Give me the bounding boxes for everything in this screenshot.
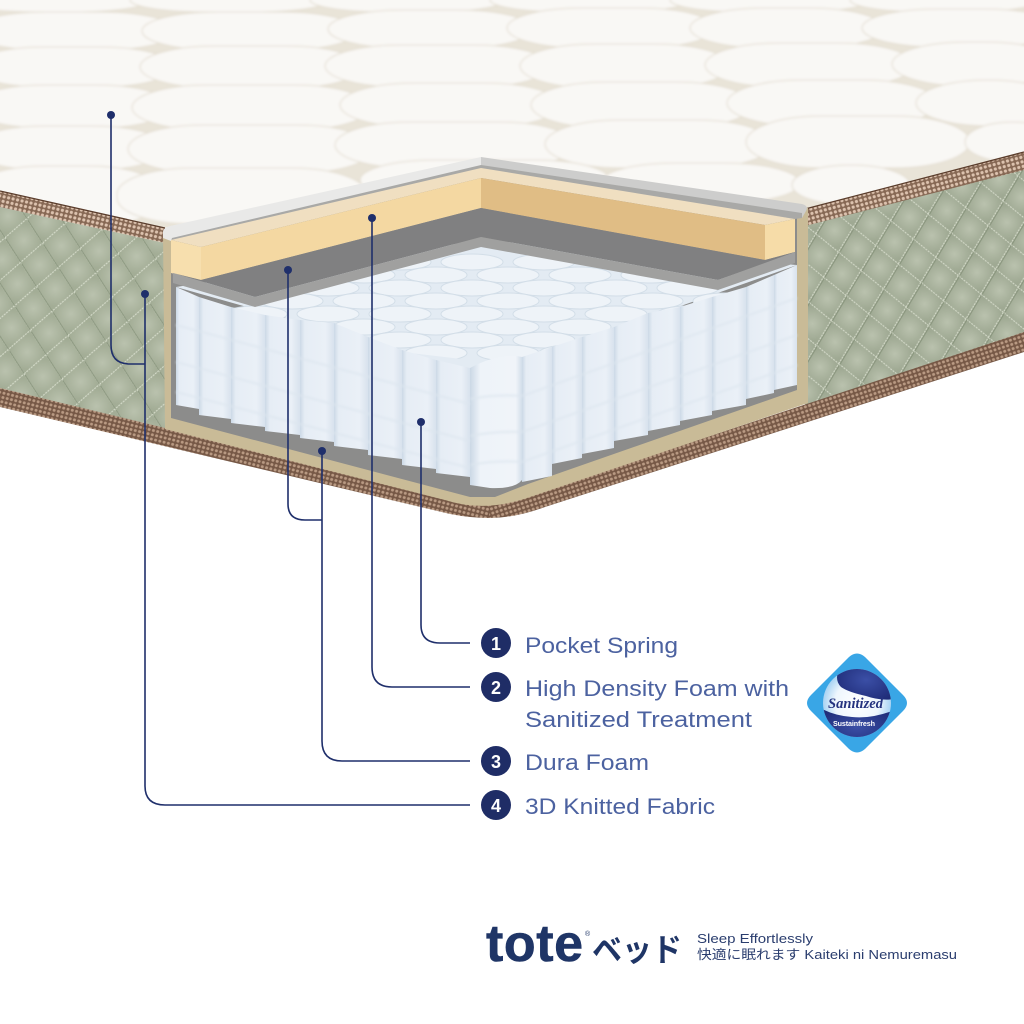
- sanitized badge: Sustainfresh: [833, 719, 875, 728]
- legend item 2: 2: [491, 678, 501, 698]
- sanitized badge: Sanitized: [828, 696, 884, 712]
- foam front left: [171, 240, 201, 280]
- line: fabric branch: [111, 115, 145, 364]
- line: dura foam branch: [288, 270, 322, 520]
- piping bottom left: [0, 388, 490, 518]
- legend item 4: 3D Knitted Fabric: [525, 794, 715, 819]
- pocket spring block: [176, 240, 797, 488]
- spring columns left face: [176, 287, 470, 477]
- foam right inner wall: [481, 178, 765, 260]
- foam top face: [171, 168, 795, 247]
- green knitted side left: [0, 207, 165, 430]
- spring columns right face: [522, 265, 797, 482]
- dura foam layer: [173, 208, 795, 307]
- tagline: Sleep Effortlessly: [697, 932, 814, 946]
- spring tops: [176, 240, 797, 370]
- mattress illustration: [0, 0, 1024, 518]
- line: 3D knitted fabric: [145, 294, 470, 805]
- rim shadow band: [171, 165, 802, 241]
- legend item 3: Dura Foam: [525, 750, 649, 775]
- tote logo: tote: [486, 915, 583, 973]
- legend item 4: 4: [491, 796, 501, 816]
- legend item 2: [481, 672, 789, 732]
- legend item 2: Sanitized Treatment: [525, 707, 753, 732]
- line: dura foam: [322, 451, 470, 761]
- legend item 3: [481, 746, 649, 776]
- tote logo: [486, 915, 682, 973]
- legend item 1: [481, 628, 678, 658]
- rim left band: [163, 157, 481, 241]
- leader lines: [111, 115, 470, 805]
- gray top: [173, 208, 795, 297]
- dark seam lines: [0, 152, 1024, 228]
- legend item 2: High Density Foam with: [525, 676, 789, 701]
- spring pocket seams: [176, 298, 797, 468]
- foam left inner wall: [201, 178, 481, 280]
- cutaway frame: [163, 160, 808, 506]
- line: pocket spring: [421, 422, 470, 643]
- legend item 1: 1: [491, 634, 501, 654]
- piping top left: [0, 191, 165, 243]
- tote logo: ®: [585, 930, 591, 938]
- foam front right: [765, 219, 795, 260]
- legend item 3: 3: [491, 752, 501, 772]
- legend item 1: Pocket Spring: [525, 633, 678, 658]
- line: high density foam: [372, 218, 470, 687]
- legend item 4: [481, 790, 715, 820]
- tagline: [697, 932, 957, 962]
- leader dots: [107, 111, 425, 455]
- sanitized badge: [807, 654, 907, 752]
- piping bottom right: [490, 332, 1024, 518]
- tagline: 快適に眠れます Kaiteki ni Nemuremasu: [697, 947, 957, 962]
- rim right band: [481, 157, 807, 218]
- cutaway inner window: [171, 168, 797, 497]
- gray edge: [173, 237, 795, 307]
- high density foam layer: [163, 157, 807, 280]
- quilted top surface: [0, 0, 1024, 232]
- tote logo: ベッド: [592, 925, 682, 971]
- front corner column: [470, 356, 522, 488]
- piping top right: [805, 152, 1024, 226]
- green knitted side right: [805, 169, 1024, 406]
